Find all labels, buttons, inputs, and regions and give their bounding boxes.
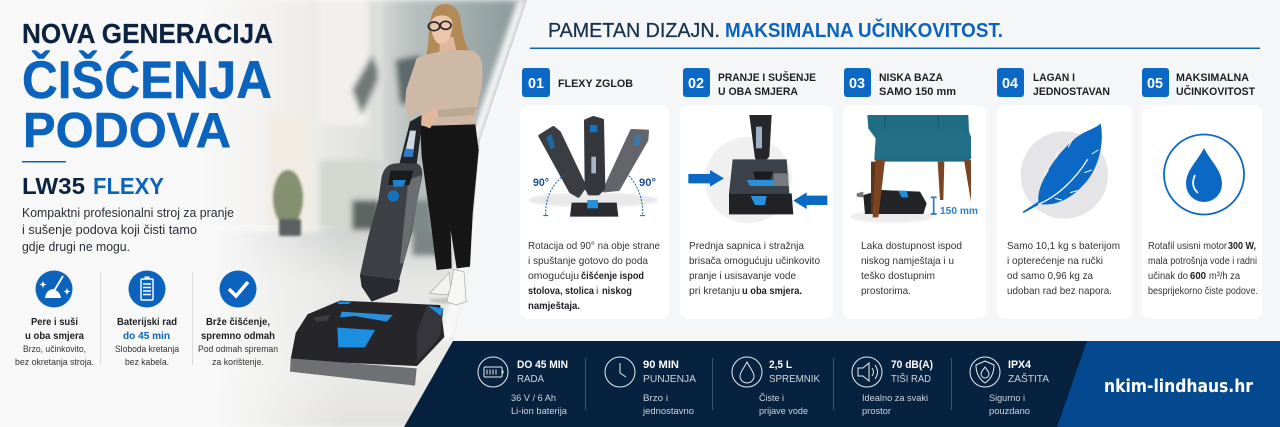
feature description: brisača omogućuju učinkovito (689, 255, 820, 267)
feature heading (1033, 72, 1110, 98)
spec: runtime: RADA (517, 373, 544, 385)
icon: battery (128, 270, 166, 308)
spec: tank: Čiste i (759, 393, 784, 404)
bottom specification band (404, 341, 1280, 427)
intro text: Kompaktni profesionalni stroj za pranje (22, 206, 234, 220)
number badge: 02 (688, 75, 704, 92)
icon: battery (478, 357, 508, 387)
card (1142, 105, 1262, 319)
heading: design and efficiency: PAMETAN DIZAJN. (548, 20, 720, 42)
icon: speaker (852, 357, 882, 387)
benefit: faster cleaning (198, 270, 278, 368)
card (997, 105, 1132, 319)
illustration: machine with two arrows (688, 115, 827, 223)
benefit: battery operation: bez kabela. (125, 357, 169, 368)
heading: design and efficiency: MAKSIMALNA UČINKOVITOST. (725, 18, 1003, 42)
spec: runtime: 36 V / 6 Ah (511, 393, 556, 404)
feature description: niskog (602, 285, 632, 297)
spec: charging: 90 MIN (643, 359, 679, 371)
number badge (522, 68, 550, 97)
icon: water drop (1164, 134, 1244, 214)
spec: noise: TIŠI RAD (891, 372, 931, 385)
spec: runtime: Li-ion baterija (511, 406, 568, 417)
feature heading: JEDNOSTAVAN (1033, 86, 1110, 98)
spec: tank (732, 357, 820, 417)
feature heading (718, 71, 816, 98)
arrow: right (688, 170, 724, 187)
card (843, 105, 986, 319)
model name (22, 173, 164, 199)
feature 04: light and simple (997, 68, 1132, 319)
feature description: Samo 10,1 kg s baterijom (1007, 240, 1120, 252)
number badge: 01 (528, 75, 544, 92)
spec: charging: PUNJENJA (643, 373, 696, 385)
benefit: faster cleaning: Pod odmah spreman (198, 344, 278, 355)
number badge: 05 (1147, 75, 1163, 92)
benefit: battery operation: Baterijski rad (117, 316, 177, 328)
feature heading: MAKSIMALNA (1176, 72, 1249, 84)
feature description: pranje i usisavanje vode (689, 270, 796, 282)
benefit: battery operation: Sloboda kretanja (115, 344, 180, 355)
illustration: chair and machine (850, 115, 971, 223)
feature description: čišćenje ispod (581, 270, 644, 282)
card (680, 105, 833, 319)
icon: feather (1021, 123, 1108, 219)
feature heading: FLEXY ZGLOB (558, 78, 633, 90)
arrow: left (793, 192, 827, 209)
icon: broom (36, 270, 72, 308)
benefit: washes and dries: Pere i suši (31, 316, 78, 328)
spec: protection (970, 357, 1049, 417)
feature description: besprijekorno čiste podove. (1148, 286, 1258, 297)
benefit: faster cleaning: Brže čišćenje, (206, 316, 270, 328)
title: Čišćenja: ČIŠĆENJA (22, 49, 272, 110)
feature description: udoban rad bez napora. (1007, 285, 1112, 297)
feature description (1148, 241, 1258, 297)
benefit: battery operation: do 45 min (123, 330, 170, 342)
dimension label: 150 mm (940, 205, 978, 217)
feature 01: flexy joint: 90° (639, 177, 656, 189)
feature description: i spuštanje gotovo do poda (528, 255, 648, 267)
feature description: omogućuju (528, 270, 579, 282)
feature description (861, 240, 962, 297)
feature heading (1176, 72, 1255, 98)
benefit: washes and dries (15, 270, 94, 368)
feature description: 300 W, (1228, 241, 1256, 252)
feature description: niskog namještaja i u (861, 255, 954, 267)
spec: runtime (478, 357, 568, 417)
number badge: 04 (1002, 75, 1019, 92)
feature description: 600 (1190, 271, 1206, 282)
spec: protection: IPX4 (1008, 359, 1032, 371)
title: Podova: PODOVA (23, 104, 231, 158)
icon: shield (970, 357, 1000, 387)
website address: nkim-lindhaus.hr (1104, 377, 1253, 397)
spec: noise: prostor (862, 406, 891, 417)
feature description (528, 240, 660, 312)
benefit: washes and dries: Brzo, učinkovito, (23, 344, 86, 355)
spec: protection: Sigurno i (989, 393, 1025, 404)
feature description: namještaja. (528, 300, 580, 312)
feature description: Laka dostupnost ispod (861, 240, 962, 252)
number badge (997, 68, 1024, 97)
feature description: od samo 0,96 kg za (1007, 270, 1093, 282)
icon: clock (605, 357, 635, 387)
cleaning machine (290, 115, 443, 386)
spec: noise: Idealno za svaki (862, 393, 928, 404)
feature heading: UČINKOVITOST (1176, 85, 1255, 98)
benefit: faster cleaning: spremno odmah (201, 330, 275, 342)
spec: tank: 2,5 L (769, 359, 792, 371)
feature heading: LAGAN I (1033, 72, 1075, 84)
panel: white right background (453, 0, 1280, 341)
feature description: prostorima. (861, 285, 911, 297)
heading: design and efficiency (548, 18, 1003, 42)
number badge: 03 (849, 75, 865, 92)
spec: runtime: DO 45 MIN (517, 359, 568, 371)
number badge (844, 68, 871, 97)
spec: tank: prijave vode (759, 406, 808, 417)
feature description: učinak do (1148, 271, 1188, 282)
model name: LW35 (22, 173, 85, 199)
feature description: i opterećenje na ručki (1007, 255, 1103, 267)
feature 03: low base (843, 68, 986, 319)
photo: woman with cleaning machine (290, 4, 483, 386)
icon: drop (732, 357, 762, 387)
spec: tank: SPREMNIK (769, 373, 820, 385)
feature heading: PRANJE I SUŠENJE (718, 71, 816, 84)
feature description: Rotacija od 90° na obje strane (528, 240, 660, 252)
feature heading: U OBA SMJERA (718, 86, 798, 98)
benefit: washes and dries: u oba smjera (25, 330, 84, 342)
feature description: stolova, stolica (528, 285, 594, 297)
intro text: i sušenje podova koji čisti tamo (22, 223, 197, 237)
feature 01: flexy joint: 90° (533, 177, 549, 189)
feature description: i (596, 285, 598, 297)
feature description: mala potrošnja vode i radni (1148, 256, 1257, 267)
feature heading (879, 72, 956, 98)
card (520, 105, 669, 319)
benefit: battery operation (115, 270, 180, 368)
intro text (22, 206, 234, 254)
woman (405, 4, 483, 305)
benefit: faster cleaning: za korištenje. (212, 357, 264, 368)
spec: charging: jednostavno (642, 406, 694, 417)
feature 02: washing and drying both ways (680, 68, 833, 319)
intro text: gdje drugi ne mogu. (22, 240, 130, 254)
icon: potted plant (273, 170, 303, 236)
feature description: Prednja sapnica i stražnja (689, 240, 804, 252)
spec: noise: 70 dB(A) (891, 359, 933, 371)
feature 01: flexy joint (520, 68, 669, 319)
number badge (683, 68, 710, 97)
feature 05: maximum efficiency (1142, 68, 1262, 319)
feature description: pri kretanju (689, 285, 740, 297)
title: Nova generacija: NOVA GENERACIJA (22, 18, 273, 49)
feature heading: SAMO 150 mm (879, 86, 956, 98)
icon: check mark (220, 270, 256, 308)
illustration: machine rotated 90 degrees (528, 117, 658, 217)
spec: protection: pouzdano (989, 406, 1030, 417)
spec: charging: Brzo i (643, 393, 668, 404)
spec: protection: ZAŠTITA (1008, 372, 1049, 385)
feature heading: NISKA BAZA (879, 72, 943, 84)
model name: FLEXY (93, 173, 164, 199)
number badge (1142, 68, 1169, 97)
photo background: interior hall (190, 0, 540, 427)
spec: charging (605, 357, 696, 417)
feature description: u oba smjera. (742, 285, 802, 297)
feature description: Rotafil usisni motor (1148, 241, 1228, 252)
feature description (1007, 240, 1120, 297)
feature description: teško dostupnim (861, 270, 935, 282)
feature description (689, 240, 820, 297)
benefit: washes and dries: bez okretanja stroja. (15, 357, 94, 368)
spec: noise (852, 357, 933, 417)
feature description: m³/h za (1209, 271, 1240, 282)
